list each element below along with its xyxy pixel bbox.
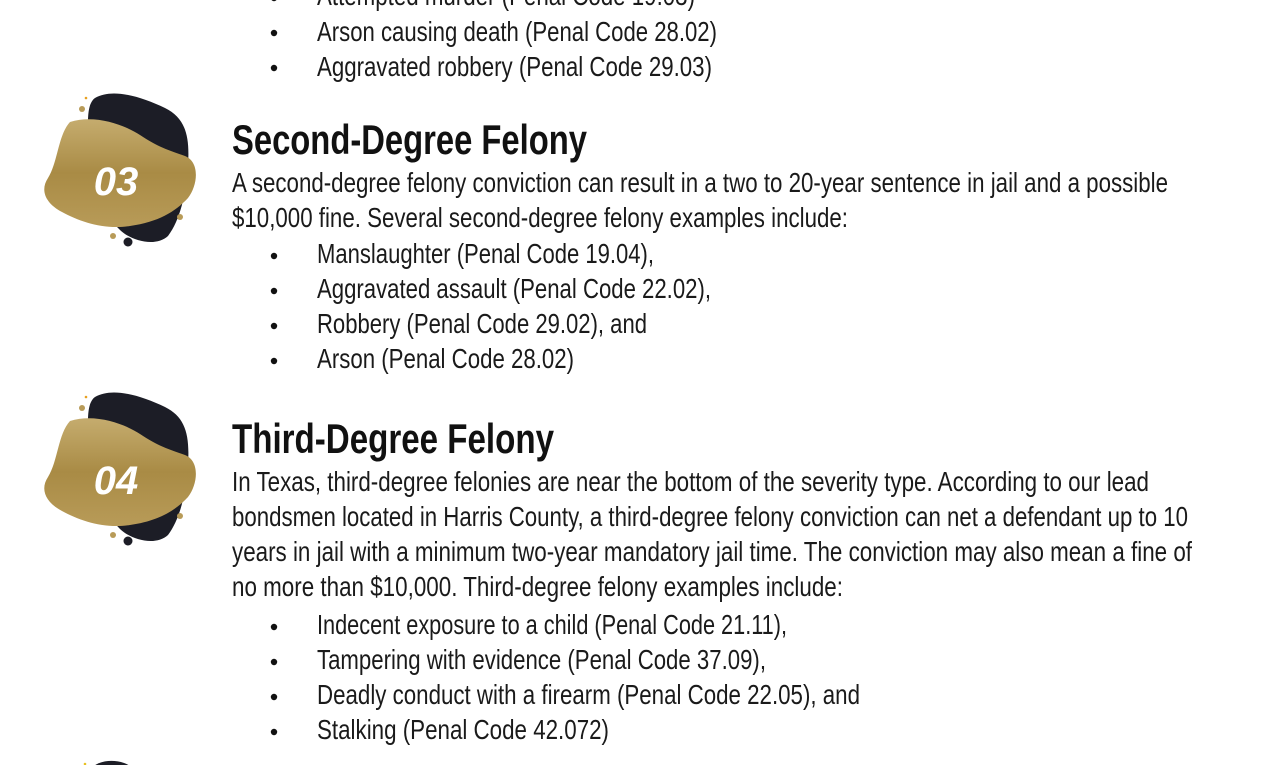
list: first-degree examples (continued): Arson causing death (Penal Code 28.02) [317,16,717,47]
list: first-degree examples (continued) [271,0,717,82]
list: third-degree examples: Deadly conduct with a firearm (Penal Code 22.05), and [317,679,860,710]
heading: Second-Degree Felony: Second-Degree Felony [232,116,588,163]
icon: 04 badge: 04 [94,459,138,503]
list: second-degree examples [271,238,711,374]
text block: second-degree description: $10,000 fine. Several second-degree felony examples include: [232,202,848,233]
text block: second-degree description [232,167,1168,233]
icon: next badge (cut off) [84,761,130,765]
list: third-degree examples: Tampering with evidence (Penal Code 37.09), [317,644,766,675]
list: second-degree examples: Aggravated assault (Penal Code 22.02), [317,273,711,304]
icon: 03 badge: 03 [94,160,138,204]
list: second-degree examples: Arson (Penal Code 28.02) [317,343,574,374]
list: second-degree examples: Robbery (Penal Code 29.02), and [317,308,647,339]
heading: Third-Degree Felony: Third-Degree Felony [232,415,554,462]
list: third-degree examples: Indecent exposure to a child (Penal Code 21.11), [317,609,787,640]
list: second-degree examples: Manslaughter (Penal Code 19.04), [317,238,654,269]
icon: 04 badge [44,392,196,546]
text block: third-degree description: no more than $10,000. Third-degree felony examples include: [232,571,843,602]
list: first-degree examples (continued): Aggravated robbery (Penal Code 29.03) [317,51,712,82]
text block: third-degree description [232,466,1192,602]
icon: 03 badge [44,93,196,247]
list: third-degree examples [271,609,860,745]
list: third-degree examples: Stalking (Penal Code 42.072) [317,714,609,745]
